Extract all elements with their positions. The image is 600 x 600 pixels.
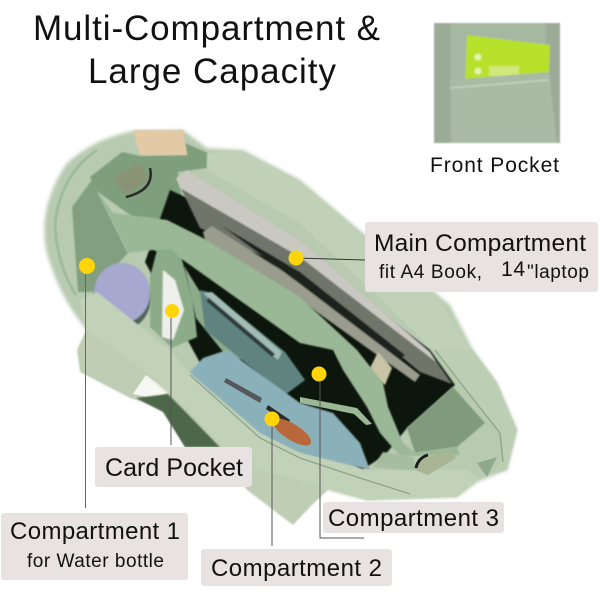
bag outer body <box>44 130 517 500</box>
label: compartment 1 <box>1 513 188 580</box>
label: compartment 2 <box>201 549 392 586</box>
front band <box>80 292 480 500</box>
label: compartment 1: Compartment 1 <box>10 518 180 545</box>
zipper line <box>190 375 410 494</box>
pocket flap <box>450 72 557 143</box>
title <box>33 9 380 91</box>
label: compartment 1: for Water bottle <box>27 551 164 572</box>
right strap band <box>207 152 470 350</box>
pocket on far right <box>477 457 497 477</box>
card pocket <box>150 249 197 348</box>
floor of right compartment <box>373 452 418 472</box>
divider flap <box>98 192 460 456</box>
label: main compartment <box>365 222 598 292</box>
label: main compartment: Main Compartment <box>374 230 586 257</box>
title: Large Capacity <box>88 52 336 91</box>
handle strap lower <box>77 328 330 525</box>
leader line: compartment 2 <box>271 420 273 546</box>
label: main compartment: 14 <box>501 258 525 281</box>
icon: D-ring top <box>112 163 151 197</box>
icon: tan leather patch <box>133 130 187 155</box>
left compartment interior <box>72 173 128 292</box>
right side band <box>433 350 517 473</box>
label: main compartment: "laptop <box>527 262 589 283</box>
panel: front pocket photo <box>434 23 560 143</box>
leader line: card pocket <box>170 311 172 445</box>
compartment 2 pocket edge <box>300 397 372 425</box>
label: compartment 3: Compartment 3 <box>328 505 499 532</box>
icon: D-ring right <box>415 450 456 475</box>
marker dots <box>79 250 326 426</box>
icon: lime green packet <box>465 35 550 80</box>
title: Multi-Compartment & <box>33 9 380 48</box>
caption: front pocket: Front Pocket <box>430 154 559 177</box>
icon: webbing straps <box>434 23 560 143</box>
leader line: main compartment <box>296 258 365 260</box>
label: main compartment: fit A4 Book, <box>379 262 482 283</box>
right end compartment wall <box>407 387 485 453</box>
back wall interior <box>90 143 208 222</box>
label: card pocket: Card Pocket <box>105 454 243 482</box>
dark strap inner <box>136 394 220 447</box>
icon: water bottle lid <box>93 263 151 330</box>
laptop <box>176 170 452 385</box>
blue pack in compartment 2 <box>190 350 370 470</box>
white gap under strap <box>133 375 170 398</box>
leader line: compartment 3 <box>320 375 364 538</box>
compartment 3 pocket with wallet <box>184 266 305 395</box>
label: compartment 2: Compartment 2 <box>211 555 382 582</box>
leader line: compartment 1 <box>84 266 86 508</box>
inner rim of left wall <box>55 150 97 295</box>
main dark interior <box>145 190 455 470</box>
label: card pocket <box>95 447 252 487</box>
illustration: open tote bag <box>44 130 517 525</box>
